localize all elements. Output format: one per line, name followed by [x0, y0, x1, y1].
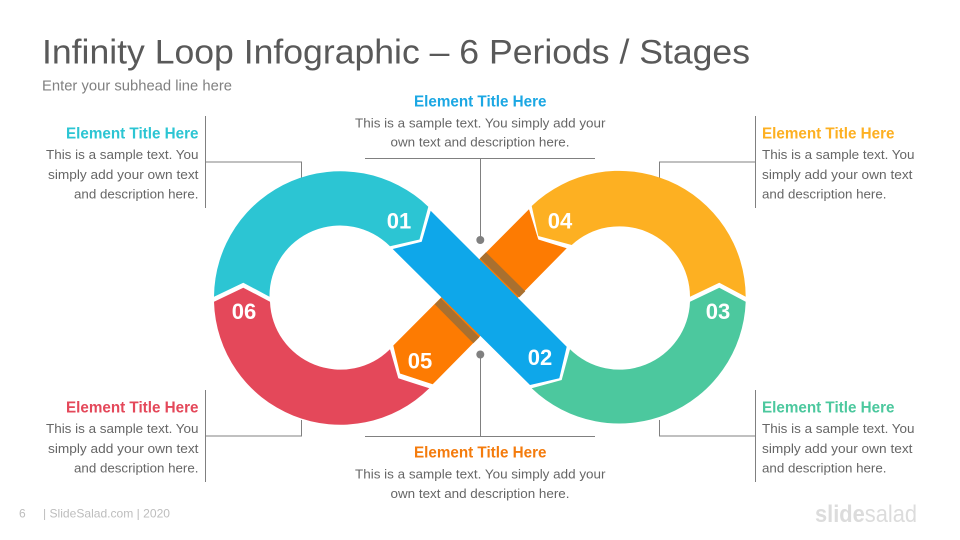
- text block: top left teal: and description here.: [74, 186, 198, 201]
- text block: bottom centre orange: own text and description here.: [390, 486, 570, 501]
- connector lines: left bottom: [206, 390, 302, 482]
- subhead: Enter your subhead line here: [42, 78, 232, 94]
- text block: bottom left red: simply add your own text: [48, 441, 199, 456]
- text block: top left teal: This is a sample text. You: [46, 147, 198, 162]
- text block: bottom right green: and description here.: [762, 460, 886, 475]
- band shadow lower: [435, 298, 479, 343]
- text block: bottom left red: [46, 399, 199, 475]
- infinity loop: [214, 171, 746, 425]
- text block: bottom right green: [762, 399, 914, 475]
- number 05: 05: [408, 348, 432, 374]
- text block: top left teal: simply add your own text: [48, 167, 199, 182]
- text block: top right yellow: [762, 125, 914, 201]
- segment 01 teal: [214, 171, 428, 297]
- text block: bottom left red: This is a sample text. You: [46, 421, 198, 436]
- connector lines: right top: [660, 116, 756, 208]
- footer logo: slidesalad: [815, 501, 917, 528]
- number 06: 06: [232, 299, 256, 324]
- text block: bottom right green: simply add your own text: [762, 441, 913, 456]
- connector lines: right bottom: [660, 390, 756, 482]
- number 02: 02: [528, 345, 552, 370]
- text block: top right yellow: This is a sample text. You: [762, 147, 914, 162]
- text block: top right yellow: and description here.: [762, 186, 886, 201]
- footer source: | SlideSalad.com | 2020: [43, 507, 170, 521]
- text block: bottom centre orange: This is a sample text. You simply add your: [355, 466, 606, 481]
- text block: top centre blue: This is a sample text. You simply add your: [355, 115, 606, 130]
- text block: top left teal: [46, 125, 199, 201]
- number 01: 01: [387, 208, 411, 234]
- title: Infinity Loop Infographic – 6 Periods / Stages: [42, 34, 750, 72]
- text block: bottom centre orange: Element Title Here: [414, 445, 547, 462]
- connector lines: left top: [206, 116, 302, 208]
- connector: bottom centre: [365, 350, 595, 436]
- band shadow upper: [480, 252, 525, 297]
- text block: top centre blue: Element Title Here: [414, 94, 547, 111]
- number 04: 04: [548, 208, 573, 234]
- connector: top centre: [365, 158, 595, 244]
- number 03: 03: [706, 299, 730, 324]
- footer page number: 6: [19, 507, 26, 521]
- text block: bottom left red: Element Title Here: [66, 399, 199, 416]
- text block: bottom right green: Element Title Here: [762, 399, 895, 416]
- text block: bottom left red: and description here.: [74, 460, 198, 475]
- text block: top right yellow: Element Title Here: [762, 125, 895, 142]
- text block: top right yellow: simply add your own text: [762, 167, 913, 182]
- segment 03 green: [532, 288, 746, 424]
- segment 04 yellow: [532, 171, 746, 297]
- segment 01 and 02 blue band: [393, 211, 567, 385]
- text block: top left teal: Element Title Here: [66, 125, 199, 142]
- text block: top centre blue: own text and description here.: [390, 135, 570, 150]
- text block: bottom centre orange: [355, 445, 606, 501]
- segment 05 and 04 orange band: [393, 209, 567, 384]
- segment 06 red: [214, 288, 429, 425]
- text block: top centre blue: [355, 94, 606, 150]
- text block: bottom right green: This is a sample text. You: [762, 421, 914, 436]
